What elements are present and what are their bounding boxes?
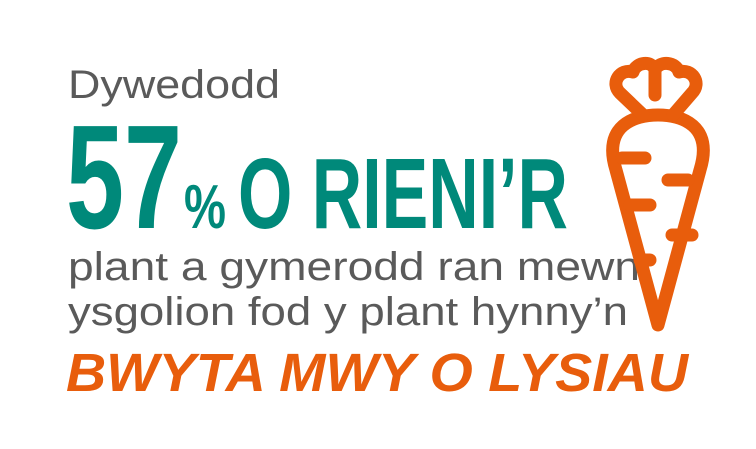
icon: carrot [613, 63, 703, 325]
body text [68, 245, 640, 334]
body text: plant a gymerodd ran mewn [68, 245, 640, 289]
big number: O RIENI’R [238, 138, 568, 250]
big number: 57 [66, 95, 182, 260]
body text: ysgolion fod y plant hynny’n [68, 290, 628, 334]
big number [66, 95, 568, 260]
intro text: Dywedodd [68, 63, 280, 107]
big number: % [184, 173, 226, 242]
highlight text: BWYTA MWY O LYSIAU [66, 343, 690, 403]
